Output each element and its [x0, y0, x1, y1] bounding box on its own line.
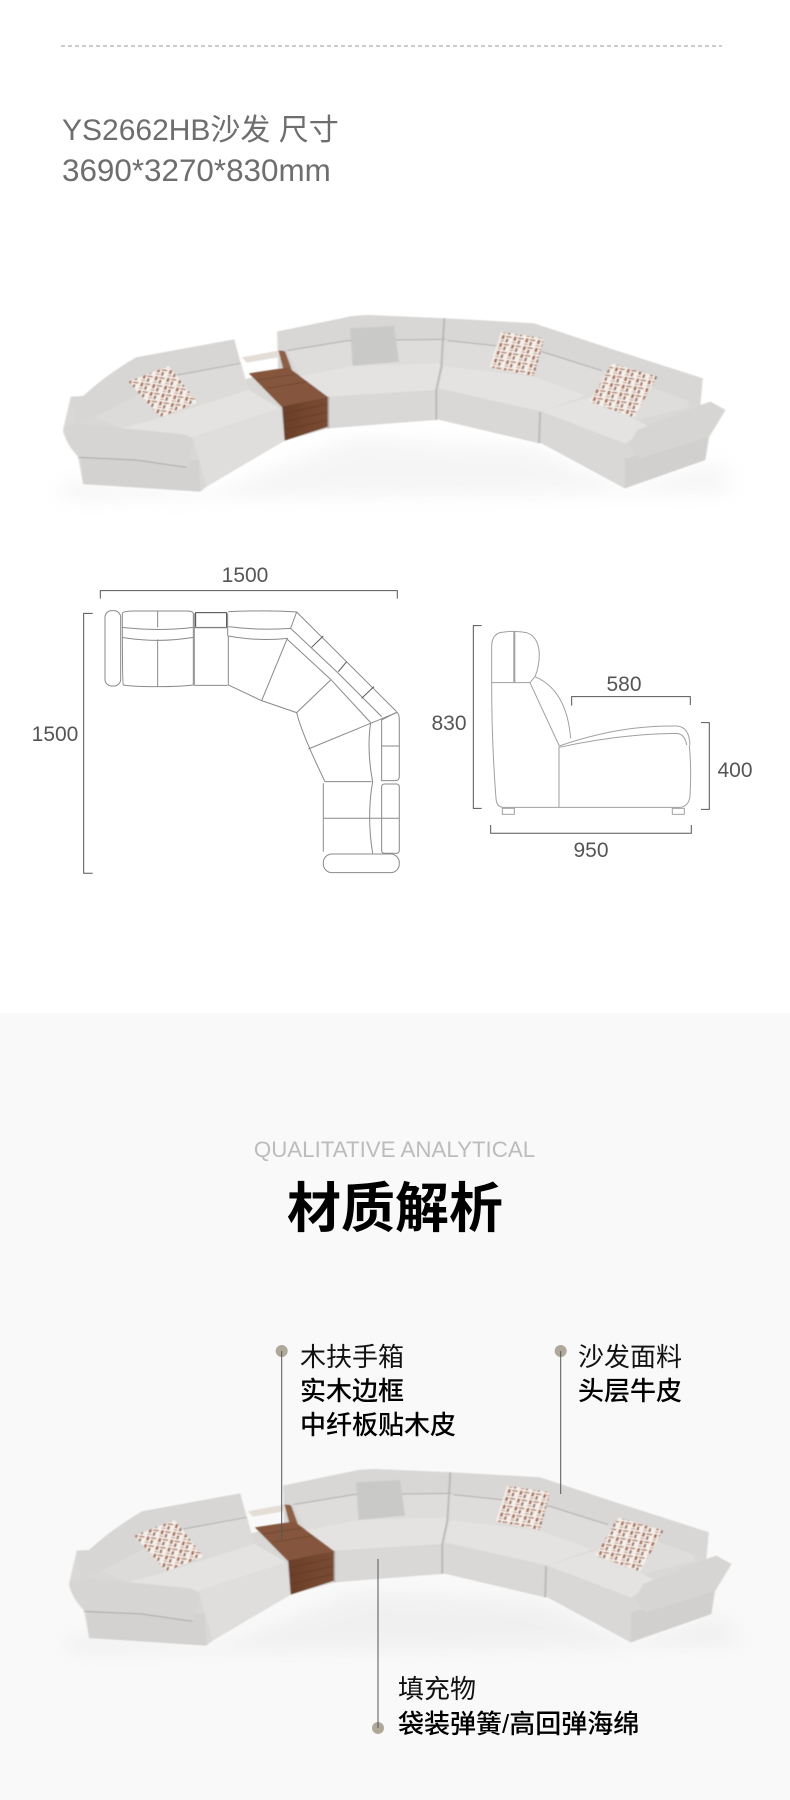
callout: filling	[372, 1559, 639, 1739]
title: product dimensions	[62, 114, 339, 188]
plan dimension labels: 1500	[222, 564, 268, 587]
width bracket	[100, 591, 397, 599]
top dashed line	[61, 45, 722, 47]
plan view drawing with dimensions	[84, 591, 399, 873]
side dimension labels	[431, 673, 753, 862]
title: product dimensions: 3690*3270*830mm	[62, 153, 331, 188]
plan dimension labels: 1500	[32, 723, 78, 746]
callout: wooden armrest box: 木扶手箱	[300, 1342, 404, 1372]
title: product dimensions: YS2662HB沙发 尺寸	[62, 114, 339, 147]
callout: filling: 填充物	[398, 1674, 476, 1704]
sofa render bottom	[66, 1469, 737, 1654]
side dimension labels: 400	[717, 759, 753, 782]
side dimension labels: 580	[606, 673, 642, 696]
side dimension labels: 950	[573, 839, 609, 862]
side dimension labels: 830	[431, 712, 467, 735]
callout: sofa fabric: 沙发面料	[578, 1342, 682, 1372]
callout: sofa fabric: 头层牛皮	[578, 1376, 682, 1406]
sofa render top	[60, 315, 731, 500]
section heading: 材质解析	[287, 1179, 503, 1239]
side view drawing with dimensions	[473, 626, 709, 833]
callout: filling: 袋装弹簧/高回弹海绵	[398, 1709, 639, 1739]
callout: wooden armrest box: 中纤板贴木皮	[300, 1410, 456, 1440]
plan dimension labels	[32, 564, 268, 746]
lower section background	[0, 1013, 790, 1800]
callout: wooden armrest box: 实木边框	[300, 1376, 404, 1406]
callout: wooden armrest box	[276, 1342, 456, 1540]
callout: sofa fabric	[555, 1342, 682, 1494]
section subtitle: QUALITATIVE ANALYTICAL	[254, 1137, 535, 1162]
height bracket	[84, 613, 93, 873]
